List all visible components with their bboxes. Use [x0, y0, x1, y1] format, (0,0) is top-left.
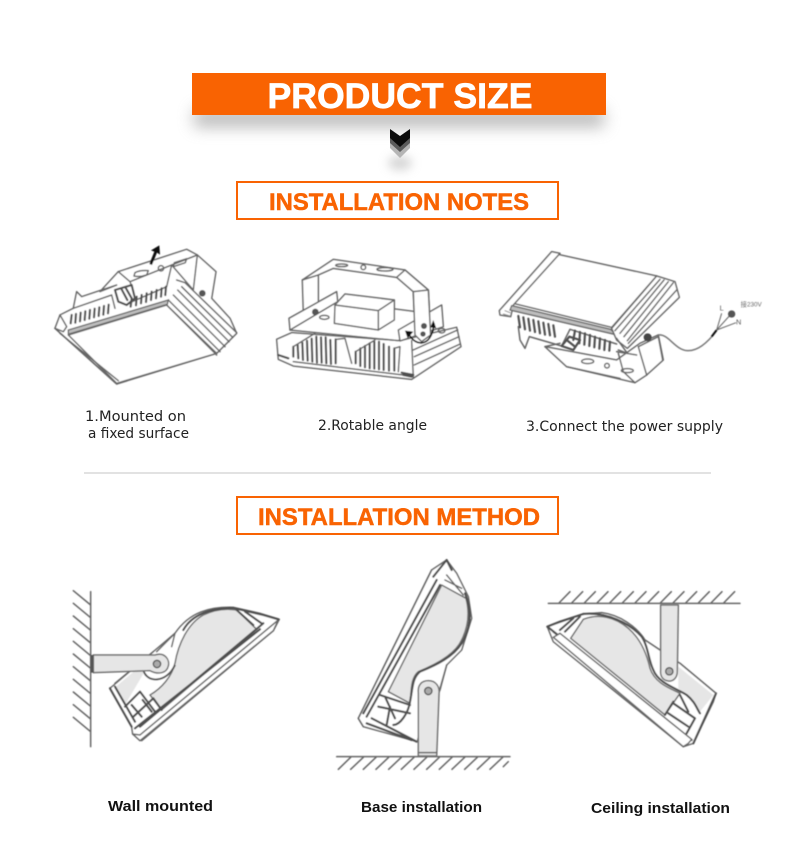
light panel face	[513, 253, 657, 327]
wire and terminals	[658, 300, 763, 351]
diagram: step 1 mounted on a fixed surface	[55, 245, 237, 384]
icon: down chevron	[388, 129, 412, 170]
arrow: lift up	[149, 245, 160, 265]
diagram: step 3 connect the power supply	[499, 252, 763, 383]
wire and terminals: 接230V	[741, 300, 763, 309]
title banner: product size: PRODUCT SIZE	[268, 77, 532, 116]
heading: installation method	[237, 497, 558, 534]
housing	[358, 560, 472, 742]
caption: step 1: 1.Mounted on	[85, 409, 186, 425]
housing	[547, 613, 716, 747]
caption: step 3: 3.Connect the power supply	[526, 419, 723, 435]
caption: step 1: a fixed surface	[88, 426, 189, 442]
wire and terminals: L	[720, 304, 724, 313]
title banner: product size	[192, 73, 606, 127]
front arm of bracket	[413, 290, 431, 342]
arrow: rotation	[409, 323, 434, 343]
heading: installation notes: INSTALLATION NOTES	[269, 189, 529, 216]
light panel face	[68, 305, 217, 383]
label: wall mounted: Wall mounted	[108, 798, 213, 815]
caption: step 1	[85, 409, 189, 442]
caption: step 2: 2.Rotable angle	[318, 418, 427, 434]
diagram: step 2 rotable angle	[277, 259, 461, 379]
diagram: wall mounted	[73, 591, 279, 747]
driver box	[334, 294, 394, 330]
base housing	[277, 327, 461, 379]
diagram: base installation	[337, 560, 510, 769]
label: ceiling installation: Ceiling installation	[591, 800, 730, 817]
post with pivot	[418, 681, 439, 756]
mounting plate and rails	[289, 292, 445, 341]
label: base installation: Base installation	[361, 799, 482, 816]
wire and terminals: N	[736, 317, 741, 326]
diagram: ceiling installation	[547, 592, 740, 747]
arm with pivot	[91, 654, 175, 679]
heading: installation method: INSTALLATION METHOD	[258, 504, 540, 531]
post with pivot	[661, 605, 678, 681]
heading: installation notes	[237, 182, 558, 219]
housing	[110, 607, 279, 741]
